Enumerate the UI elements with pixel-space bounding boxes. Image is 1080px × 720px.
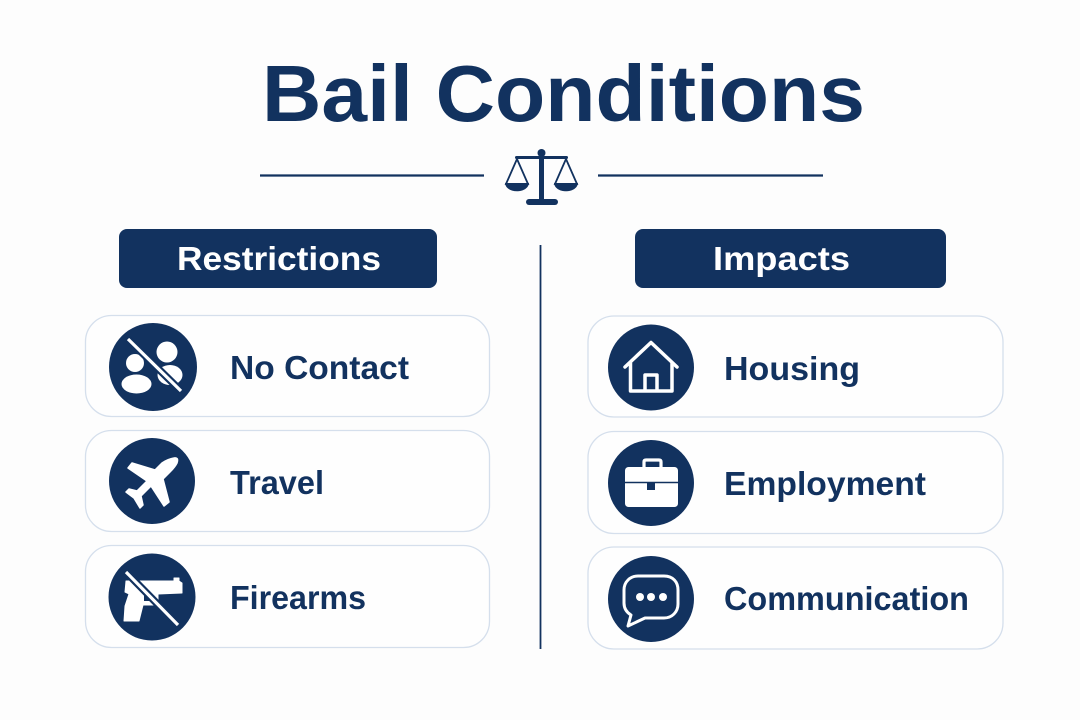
title divider with scales icon xyxy=(260,149,823,205)
icon: airplane xyxy=(109,438,195,524)
icon: speech bubble xyxy=(608,556,694,642)
icon: no firearms xyxy=(108,554,196,640)
vertical divider xyxy=(540,245,542,649)
heading: Impacts xyxy=(635,229,946,288)
label: Firearms xyxy=(230,579,366,616)
panel: Firearms xyxy=(86,546,490,648)
label: Communication xyxy=(724,580,969,617)
icon: no contact xyxy=(109,323,197,411)
panel: Travel xyxy=(86,430,490,532)
title: Bail Conditions xyxy=(262,49,865,138)
heading: Restrictions: Restrictions xyxy=(177,240,381,277)
panel: No Contact xyxy=(86,316,490,416)
icon: briefcase xyxy=(608,440,694,526)
label: No Contact xyxy=(230,349,409,386)
panel: Communication xyxy=(588,547,1003,649)
heading: Restrictions xyxy=(119,229,437,288)
label: Housing xyxy=(724,350,860,387)
label: Employment xyxy=(724,465,926,502)
icon: house xyxy=(608,324,694,410)
heading: Impacts: Impacts xyxy=(713,240,850,277)
label: Travel xyxy=(230,464,324,501)
panel: Employment xyxy=(588,432,1003,534)
panel: Housing xyxy=(588,316,1003,417)
icon: scales of justice xyxy=(505,149,578,205)
